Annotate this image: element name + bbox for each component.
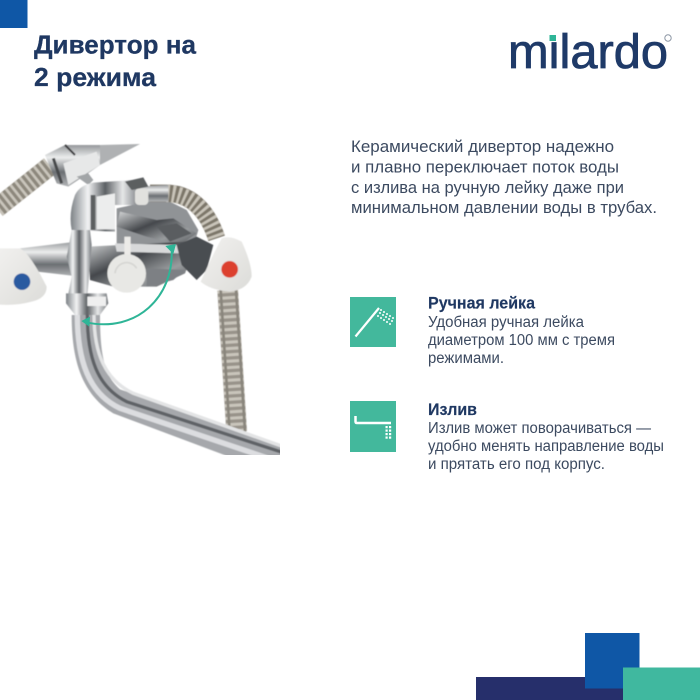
arrow: teal water switch	[81, 244, 176, 327]
icon: hand shower	[350, 297, 396, 347]
title: Дивертор на	[34, 30, 197, 60]
intro paragraph: минимальном давлении воды в трубах.	[351, 199, 657, 217]
feature text: hand shower: режимами.	[428, 350, 504, 367]
right handle red cap	[221, 261, 238, 278]
hose: curved right	[150, 193, 217, 238]
feature text: hand shower: Ручная лейка	[428, 294, 536, 312]
logo: milardo: milardo	[508, 26, 668, 79]
decorative blocks: bottom right	[476, 633, 700, 700]
diverter knob	[107, 237, 146, 293]
feature text: hand shower: Удобная ручная лейка	[428, 314, 584, 331]
spout	[72, 315, 283, 463]
central body	[67, 230, 192, 297]
intro paragraph: Керамический дивертор надежно	[351, 138, 614, 156]
feature text: spout: Излив	[428, 401, 477, 419]
left handle blue cap	[14, 273, 30, 290]
icon: spout	[350, 401, 396, 452]
valve chrome details	[117, 212, 197, 245]
feature text: hand shower: диаметром 100 мм с тремя	[428, 332, 615, 349]
feature text: spout: удобно менять направление воды	[428, 438, 664, 455]
intro paragraph	[351, 138, 657, 217]
diverter body top	[71, 177, 168, 232]
feature text: spout: Излив может поворачиваться —	[428, 420, 651, 437]
title: 2 режима	[34, 62, 157, 92]
hose: lower right	[221, 290, 245, 432]
right handle	[201, 237, 252, 292]
hose: upper left	[0, 166, 50, 208]
feature text: spout	[428, 401, 664, 473]
left handle	[0, 248, 47, 305]
nut	[66, 293, 108, 315]
wall plate	[116, 201, 199, 244]
feature text: spout: и прятать его под корпус.	[428, 456, 605, 473]
intro paragraph: с излива на ручную лейку даже при	[351, 179, 624, 197]
shower holder and handset tube	[45, 144, 140, 187]
right chrome elbow	[177, 237, 213, 280]
intro paragraph: и плавно переключает поток воды	[351, 158, 619, 176]
decorative square: top left	[0, 0, 28, 28]
title	[34, 30, 197, 92]
feature text: hand shower	[428, 294, 615, 367]
product photo: faucet	[0, 144, 283, 463]
pipe to left handle	[20, 242, 72, 276]
